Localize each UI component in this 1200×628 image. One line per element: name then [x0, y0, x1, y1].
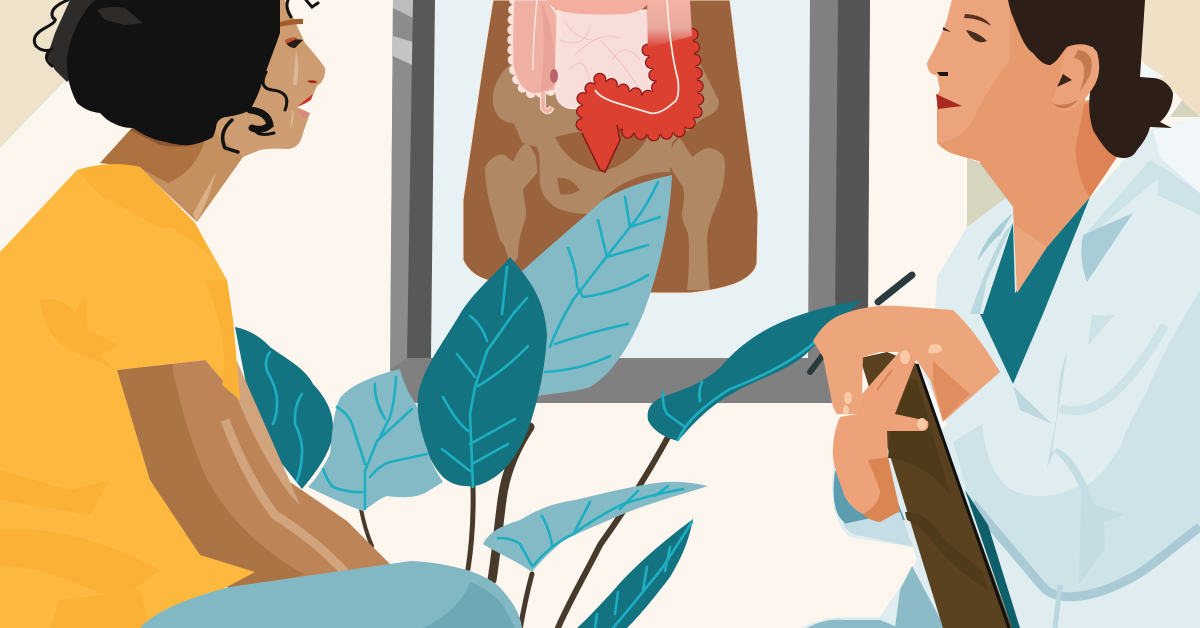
- transverse colon: [547, 0, 650, 15]
- patient: [0, 0, 522, 628]
- lab coat: [800, 117, 1200, 628]
- leaf: dark bottom: [577, 519, 693, 628]
- pants: [140, 561, 522, 628]
- leaf: large dark centre: [418, 257, 547, 487]
- poster frame: [390, 0, 870, 403]
- hair: [47, 0, 120, 82]
- ear: [1052, 44, 1099, 111]
- hands and forearm: [813, 306, 1000, 522]
- sleeve: [834, 470, 905, 532]
- doctor: [800, 0, 1200, 628]
- face: [927, 0, 1085, 163]
- pelvis bones: [493, 57, 719, 214]
- neck: [100, 110, 270, 222]
- anatomy chart: lower body: [463, 0, 758, 293]
- ascending colon: [512, 0, 558, 111]
- leaf: dark behind arm: [235, 327, 333, 489]
- arm: [117, 357, 390, 590]
- coat folds: [1047, 352, 1124, 585]
- coat lower panel: [953, 290, 1200, 601]
- plant stems: [361, 427, 668, 628]
- leaf: light left: [308, 369, 443, 511]
- neck: [980, 100, 1115, 293]
- inflamed descending colon: [582, 0, 698, 172]
- small intestine: [556, 10, 658, 109]
- leaf: light back: [515, 175, 672, 396]
- scrubs: [980, 197, 1090, 384]
- leaf: light lower horizontal: [483, 482, 708, 572]
- femur left: [485, 143, 537, 268]
- face: [200, 0, 325, 157]
- leaf: dark held by doctor: [648, 300, 862, 441]
- pen: [810, 275, 912, 372]
- hair: [1008, 0, 1173, 158]
- yellow shirt: [0, 164, 255, 628]
- femur right: [668, 138, 725, 290]
- clipboard: [860, 352, 1020, 628]
